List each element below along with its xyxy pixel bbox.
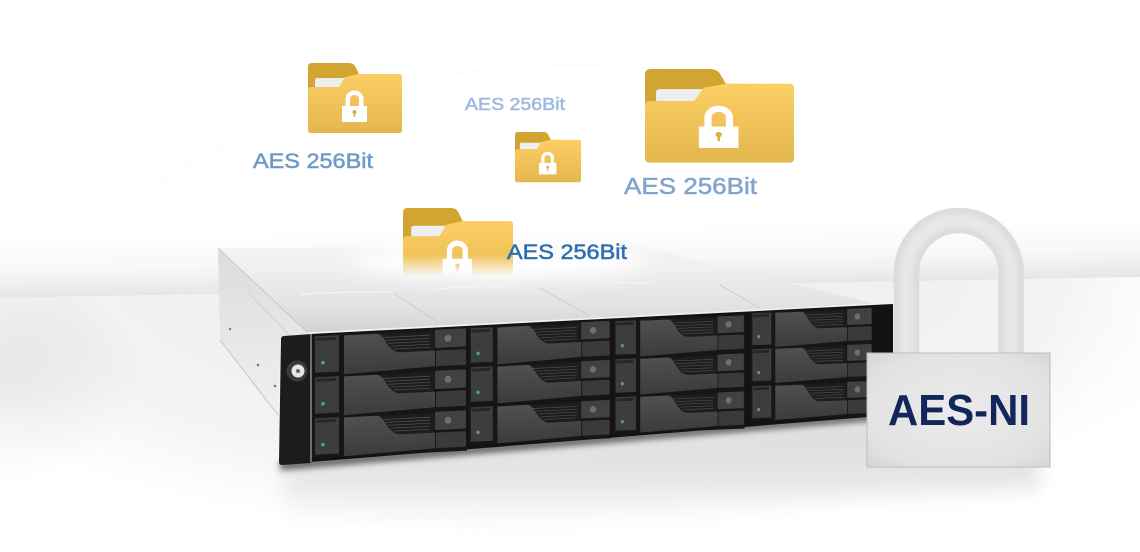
folder: large right [645,69,794,163]
drive bays column 4 [750,307,872,421]
server side panel [218,248,308,415]
folder: fading into server [403,208,513,275]
drive bays column 1 [312,327,467,458]
server front edge [308,304,880,333]
background [0,251,1140,512]
label: small AES 256Bit: AES 256Bit [465,94,565,114]
label: AES 256Bit beside fading folder: AES 256Bit [507,240,627,264]
padlock body [867,353,1050,467]
padlock AES-NI [867,220,1050,467]
server front chassis [310,304,893,462]
server lock ear [279,334,311,465]
label: large AES 256Bit: AES 256Bit [624,173,758,199]
folder: small centre [515,132,581,182]
server top panel [218,246,880,333]
drive bays column 2 [468,320,611,445]
folder: top left [308,63,402,133]
padlock label: AES-NI [888,386,1030,435]
NAS server [218,246,893,470]
padlock shackle [906,220,1011,358]
label: top left AES 256Bit: AES 256Bit [253,149,373,173]
drive bays column 3 [613,314,745,434]
shadow under server [280,413,880,470]
